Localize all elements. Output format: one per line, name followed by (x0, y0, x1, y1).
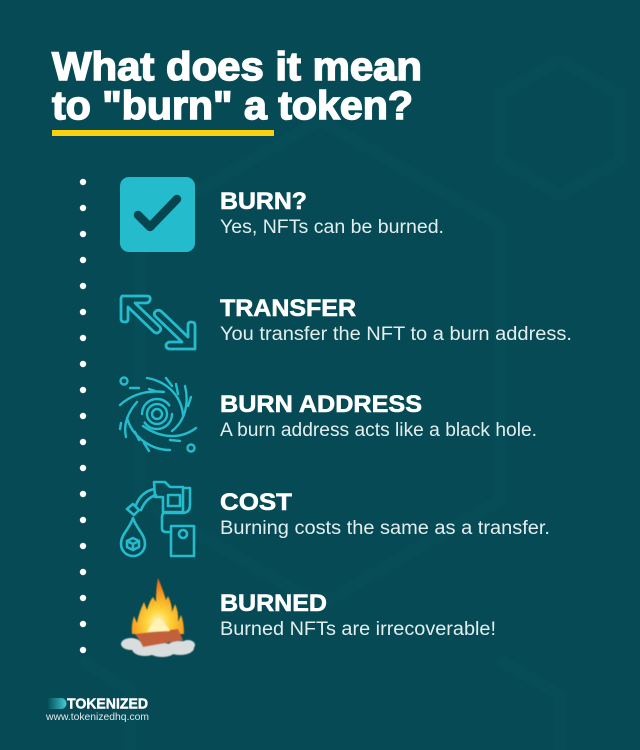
text: burned: Burned NFTs are irrecoverable! (220, 619, 496, 640)
text: burn (220, 188, 444, 238)
text: burn address: BURN ADDRESS (220, 391, 422, 418)
icon: black hole (120, 378, 196, 452)
text: burned (220, 590, 496, 640)
icon: transfer arrows (121, 296, 195, 349)
text: cost: Burning costs the same as a transfer. (220, 518, 550, 539)
title (52, 45, 422, 128)
title: What does it mean (52, 45, 422, 89)
text: transfer: You transfer the NFT to a burn address. (220, 324, 572, 345)
text: transfer: TRANSFER (220, 295, 356, 322)
dotted timeline (80, 179, 86, 653)
icon: checkbox (120, 177, 195, 252)
title: to "burn" a token? (52, 84, 413, 128)
text: burn address (220, 391, 537, 441)
text: burned: BURNED (220, 590, 327, 617)
logo: TOKENIZED (67, 696, 148, 712)
title underline (52, 130, 274, 136)
text: cost (220, 489, 550, 539)
logo: www.tokenizedhq.com (45, 711, 149, 723)
text: burn: BURN? (220, 188, 307, 215)
text: cost: COST (220, 489, 292, 516)
logo (45, 696, 149, 723)
icon: campfire (121, 578, 195, 657)
text: burn address: A burn address acts like a black hole. (220, 420, 537, 441)
text: burn: Yes, NFTs can be burned. (220, 217, 444, 238)
icon: gas pump and droplet (121, 482, 194, 556)
text: transfer (220, 295, 572, 345)
